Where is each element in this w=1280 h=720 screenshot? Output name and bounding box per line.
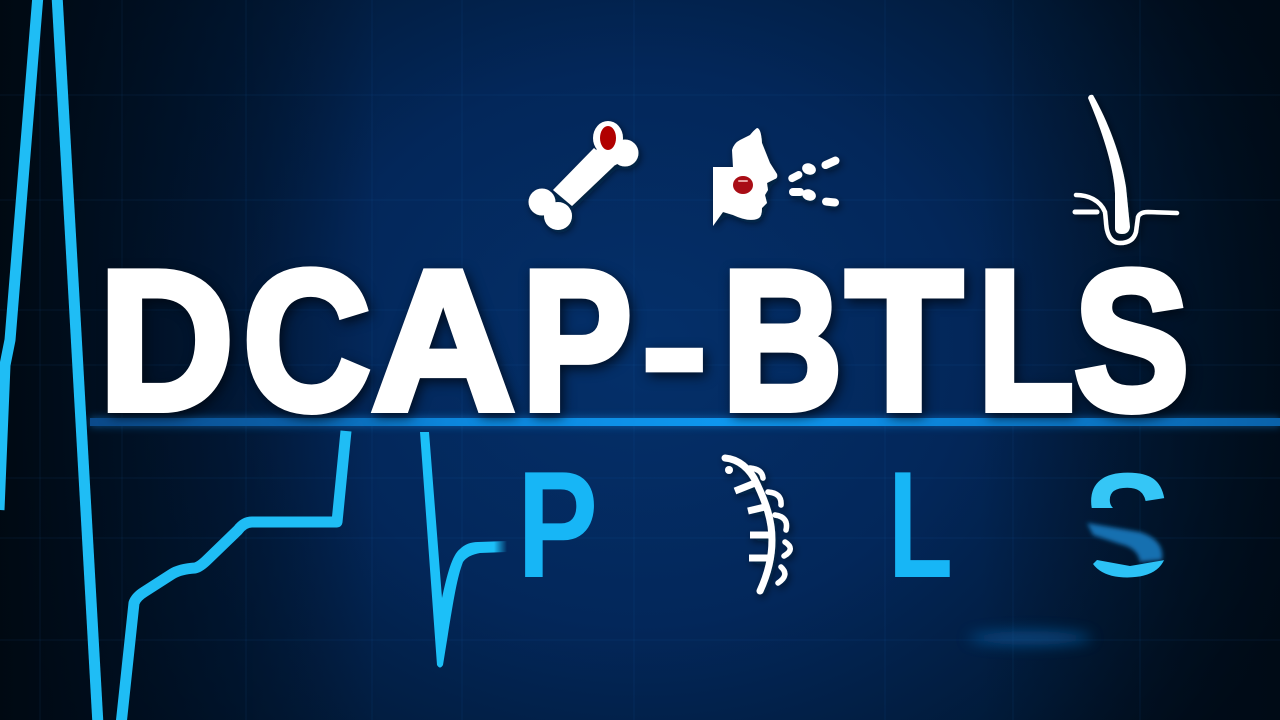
letter S, mid-animation with motion blur: S (1083, 443, 1172, 608)
title: D (99, 230, 234, 452)
icon: face profile with nosebleed droplets (713, 128, 841, 226)
icon: sutured wound (725, 458, 790, 591)
ECG trace: second dip (420, 432, 507, 668)
title: A (372, 230, 515, 452)
title: P (522, 230, 632, 452)
title: T (846, 230, 962, 452)
title: L (978, 230, 1073, 452)
baseline glow (90, 417, 1280, 427)
icon: hair follicle (1075, 95, 1177, 243)
letter L: L (888, 439, 953, 609)
title: S (1074, 230, 1189, 452)
blurred glow below S (968, 631, 1092, 645)
letter S, mid-animation with motion blur (1086, 472, 1166, 578)
letter S, mid-animation with motion blur: S (1083, 443, 1172, 608)
letter P: P (517, 440, 598, 610)
ECG trace: main spike and stepped segment (0, 0, 346, 720)
title: C (243, 230, 371, 452)
title: - (642, 261, 707, 434)
title: B (722, 230, 842, 452)
icon: bone with red marrow spot (528, 121, 638, 230)
